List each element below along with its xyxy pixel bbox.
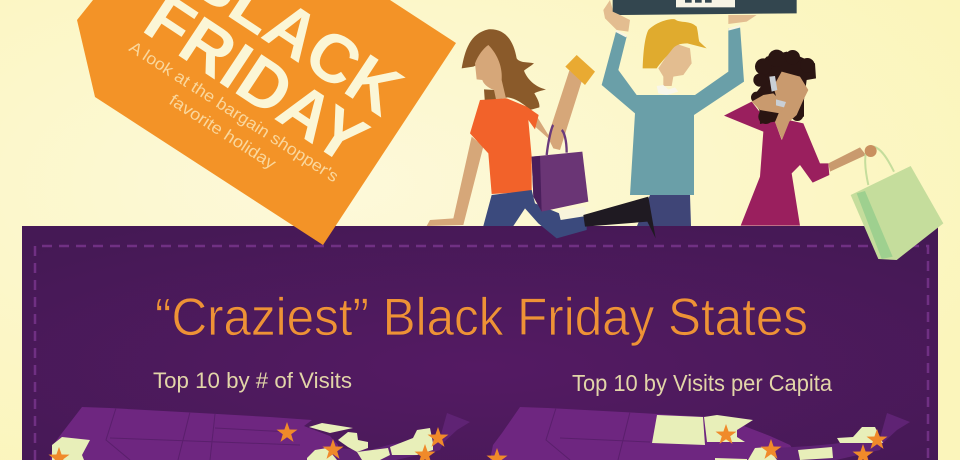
- black boot: [583, 197, 656, 238]
- phone hand: [752, 93, 787, 113]
- person: woman with card and purple bag: [427, 29, 656, 238]
- person: man carrying box: [602, 0, 797, 226]
- map: top 10 by visits per capita: [486, 407, 910, 460]
- head: woman on phone: [751, 50, 816, 140]
- orange shirt: [470, 98, 539, 194]
- hand: [865, 145, 877, 157]
- box label: [676, 0, 735, 7]
- heading: craziest states: “Craziest” Black Friday States: [155, 288, 808, 347]
- white sock: [558, 207, 586, 220]
- arm to bag: [828, 147, 866, 172]
- map: top 10 by visits: [48, 407, 470, 460]
- raised arm: [533, 71, 583, 150]
- subheading: visits: Top 10 by # of Visits: [153, 368, 352, 393]
- face and chest: [773, 72, 808, 140]
- trousers: [637, 195, 691, 226]
- man upper body: [602, 0, 797, 195]
- jeans: [483, 190, 587, 238]
- phone: [769, 76, 786, 107]
- teal sweater: [602, 26, 744, 195]
- blond hair and cap: [643, 19, 707, 68]
- magenta dress: [724, 102, 829, 226]
- black curly hair: [751, 50, 816, 124]
- panel: craziest states: [22, 226, 938, 460]
- subheading: per capita: Top 10 by Visits per Capita: [572, 370, 832, 396]
- hair: [462, 29, 546, 110]
- tag subtitle line one: A look at the bargain shopper's: [126, 38, 342, 186]
- green bag: [851, 146, 943, 260]
- neck and face: [658, 43, 692, 86]
- far arm: [427, 137, 483, 226]
- credit card: [565, 55, 595, 85]
- face and neck: [475, 45, 506, 99]
- hands: [603, 0, 757, 32]
- person: woman on phone with green bag: [724, 102, 943, 260]
- price tag: black friday: [77, 0, 456, 245]
- collar: [657, 85, 678, 95]
- sleeve cuffs: [615, 25, 741, 37]
- purple bag: [532, 125, 588, 212]
- box: [613, 0, 797, 15]
- tag subtitle line two: favorite holiday: [166, 91, 280, 173]
